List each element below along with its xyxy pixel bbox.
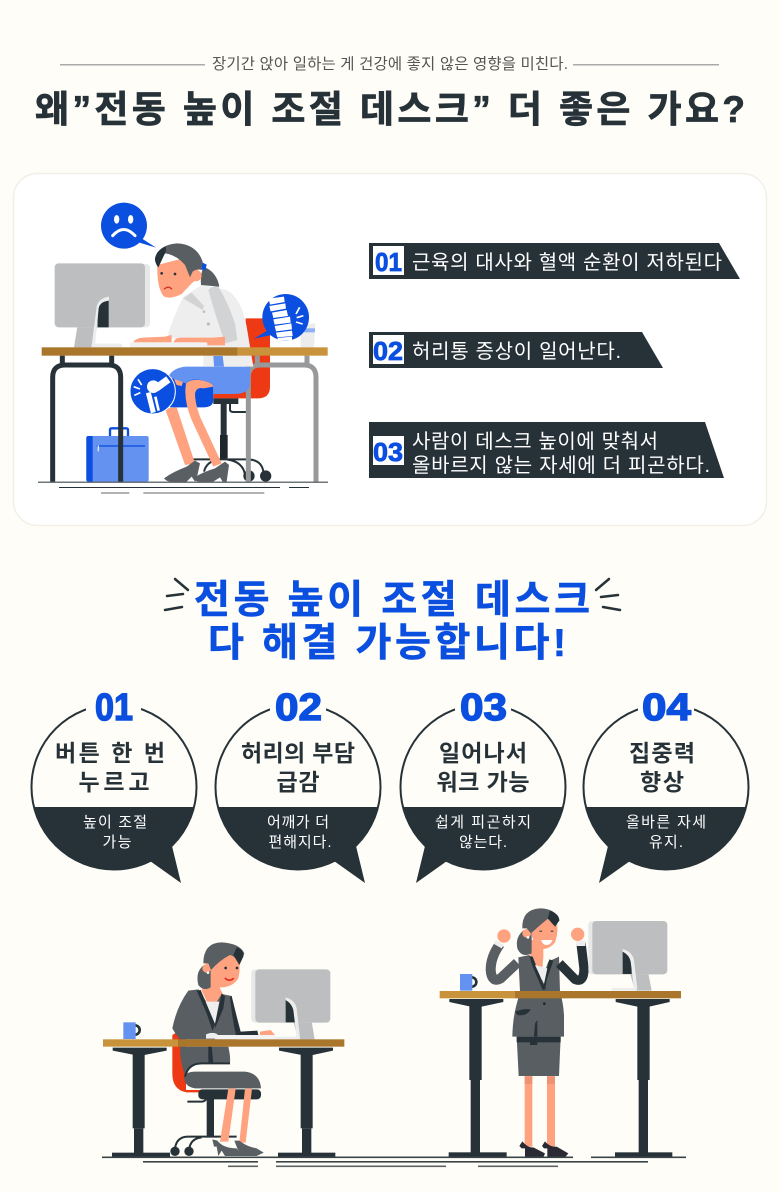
icon: sad face bubble bbox=[101, 203, 156, 249]
monitor bbox=[55, 263, 150, 347]
bubble 02: 허리의 부담 bbox=[241, 740, 355, 766]
desk legs bbox=[112, 1048, 335, 1158]
item 03 banner bbox=[369, 422, 724, 478]
bubble 02: 편해지다. bbox=[268, 834, 332, 851]
item 02 banner: 02 bbox=[373, 336, 403, 366]
section heading: 다 해결 가능합니다! bbox=[208, 622, 566, 665]
ground lines bbox=[102, 1156, 686, 1167]
bubble 04 bbox=[584, 687, 748, 883]
icon: burst right bbox=[596, 579, 620, 610]
monitor bbox=[251, 969, 330, 1039]
icon: knee bubble bbox=[130, 369, 175, 414]
illustration: tired woman at desk bbox=[38, 203, 328, 494]
item 03 banner: 사람이 데스크 높이에 맞춰서 bbox=[412, 430, 658, 453]
header: subtitle with rules: 장기간 앉아 일하는 게 건강에 좋지 않은 영향을 미친다. bbox=[212, 55, 568, 73]
item 03 banner: 올바르지 않는 자세에 더 피곤하다. bbox=[412, 454, 710, 477]
bubble 04: 집중력 bbox=[629, 740, 695, 766]
panel: sitting problems bbox=[14, 174, 766, 526]
upper body bbox=[172, 989, 275, 1039]
legs bbox=[220, 1089, 252, 1143]
section heading bbox=[165, 579, 620, 665]
bubble 01: 01 bbox=[95, 687, 133, 729]
arm left bbox=[491, 944, 517, 980]
desk top bbox=[42, 347, 328, 356]
section heading: 전동 높이 조절 데스크 bbox=[194, 579, 590, 622]
item 01 banner: 01 bbox=[375, 247, 402, 277]
item 03 banner: 03 bbox=[373, 437, 403, 467]
bubble 03 bbox=[400, 687, 566, 883]
bubble 02: 02 bbox=[275, 687, 322, 729]
shoes bbox=[164, 461, 229, 482]
chair bbox=[170, 1027, 261, 1156]
skirt under bbox=[170, 378, 213, 407]
chair bbox=[193, 318, 271, 482]
skirt bbox=[168, 367, 250, 394]
head and neck bbox=[517, 908, 559, 975]
title: 왜”전동 높이 조절 데스크” 더 좋은 가요? bbox=[35, 89, 745, 130]
bubble 04: 올바른 자세 bbox=[626, 814, 706, 831]
bubble 04: 향상 bbox=[640, 769, 684, 795]
bubble 01: 누르고 bbox=[78, 769, 150, 795]
skirt bbox=[517, 1037, 561, 1076]
bubble 01: 버튼 한 번 bbox=[55, 740, 165, 766]
mug bbox=[460, 974, 476, 991]
bubble 03: 워크 가능 bbox=[436, 769, 530, 795]
jacket bbox=[512, 955, 564, 1037]
cup bbox=[301, 323, 315, 347]
shoes bbox=[519, 1141, 568, 1157]
desk front legs bbox=[53, 356, 121, 482]
illustration: seated woman at adjustable desk bbox=[103, 942, 344, 1158]
bubble 01: 높이 조절 bbox=[83, 814, 147, 831]
shoes bbox=[212, 1139, 264, 1156]
bubble 04: 04 bbox=[642, 687, 691, 729]
bubble 02: 어깨가 더 bbox=[267, 814, 329, 831]
bubble 01: 가능 bbox=[102, 834, 132, 851]
desk legs bbox=[449, 999, 672, 1157]
desk back legs bbox=[248, 356, 316, 482]
bubble 03: 쉽게 피곤하지 bbox=[435, 814, 531, 831]
shirt bbox=[167, 285, 253, 367]
jacket lower and skirt bbox=[180, 1047, 230, 1075]
bubble 03: 일어나서 bbox=[439, 740, 527, 766]
icon: burst left bbox=[165, 579, 188, 610]
bubble 02: 급감 bbox=[276, 769, 320, 795]
keyboard bbox=[130, 342, 207, 347]
item 02 banner bbox=[369, 332, 663, 368]
briefcase bbox=[86, 428, 149, 482]
bubble 04: 유지. bbox=[649, 834, 683, 851]
bubble 02 bbox=[216, 687, 380, 883]
head bbox=[155, 243, 219, 298]
illustration: standing woman at raised desk bbox=[440, 908, 681, 1157]
legs bbox=[525, 1075, 555, 1147]
arm right bbox=[559, 943, 584, 980]
ground lines bbox=[38, 482, 328, 494]
bubble 01 bbox=[32, 687, 196, 883]
bubble 03: 03 bbox=[460, 687, 507, 729]
item 01 banner bbox=[369, 243, 740, 279]
head and neck bbox=[197, 942, 244, 1012]
desk top bbox=[103, 1039, 344, 1047]
item 01 banner: 근육의 대사와 혈액 순환이 저하된다 bbox=[412, 251, 722, 274]
hands bbox=[133, 335, 225, 345]
item 02 banner: 허리통 증상이 일어난다. bbox=[412, 340, 621, 363]
monitor bbox=[588, 921, 667, 991]
icon: spine bubble bbox=[254, 294, 309, 341]
bubble 03: 않는다. bbox=[459, 834, 507, 851]
mug bbox=[123, 1022, 140, 1039]
desk top bbox=[440, 991, 681, 998]
legs bbox=[165, 379, 222, 467]
